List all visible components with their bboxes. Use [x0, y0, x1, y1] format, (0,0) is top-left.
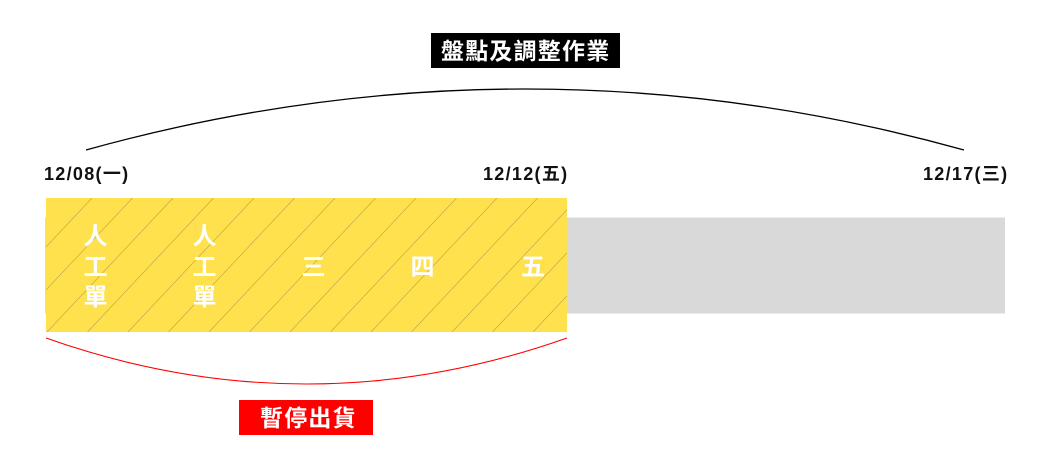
- heading: inventory and adjustment: 盤點及調整作業: [441, 38, 610, 64]
- day 1: manual orders: 工: [84, 254, 108, 281]
- date: start: 12/08(一): [44, 164, 129, 184]
- day 3: 三: [302, 254, 326, 281]
- label: shipping paused: 暫停出貨: [260, 405, 357, 431]
- heading: inventory and adjustment: [431, 33, 620, 68]
- day 4: 四: [410, 254, 434, 281]
- day 1: manual orders: [84, 223, 108, 311]
- day 2: manual orders: 工: [192, 254, 216, 281]
- day 2: manual orders: 單: [192, 284, 216, 311]
- red arc: shipping paused: [46, 338, 567, 384]
- date: middle: 12/12(五): [483, 164, 568, 184]
- day 1: manual orders: 單: [84, 284, 108, 311]
- black arc: inventory period: [86, 89, 964, 150]
- day 2: manual orders: 人: [192, 223, 216, 250]
- day 1: manual orders: 人: [84, 223, 108, 250]
- day 5: 五: [521, 254, 545, 281]
- day 2: manual orders: [192, 223, 216, 311]
- label: shipping paused: [239, 400, 373, 435]
- yellow hatched panel: paused shipping period: [46, 198, 567, 332]
- date: end: 12/17(三): [923, 164, 1008, 184]
- gray bar: full period: [45, 218, 1005, 314]
